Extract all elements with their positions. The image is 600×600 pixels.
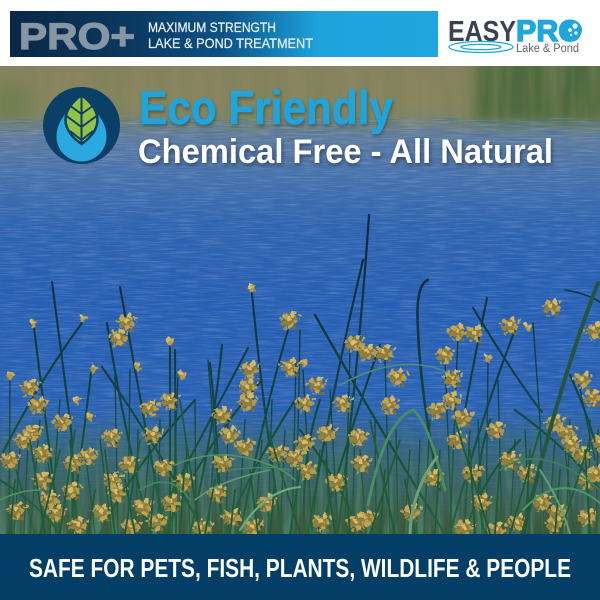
icon: leaf and water drop badge <box>43 87 120 164</box>
EasyPro Lake & Pond logo: PRO <box>516 15 582 48</box>
header banner <box>10 11 438 57</box>
background thin stems <box>9 323 598 534</box>
reeds <box>0 215 600 540</box>
broad pale blades <box>0 283 600 534</box>
PRO+ wordmark: PRO+ <box>19 16 135 57</box>
foreground stems <box>10 400 590 534</box>
banner subtitle: LAKE & POND TREATMENT <box>148 35 313 51</box>
title: Eco Friendly: Eco Friendly <box>139 81 393 134</box>
EasyPro Lake & Pond logo: Lake & Pond <box>516 43 579 55</box>
banner subtitle <box>148 19 313 51</box>
seed head clusters <box>0 284 600 540</box>
EasyPro Lake & Pond logo <box>448 15 582 55</box>
banner subtitle: MAXIMUM STRENGTH <box>148 19 276 35</box>
icon: bubbles in O <box>563 20 582 40</box>
main stems <box>0 215 600 534</box>
footer bar <box>0 534 600 600</box>
EasyPro Lake & Pond logo: EASY <box>448 16 516 48</box>
subtitle: Chemical Free - All Natural: Chemical Free - All Natural <box>138 133 553 171</box>
icon: water ripples <box>449 42 513 52</box>
